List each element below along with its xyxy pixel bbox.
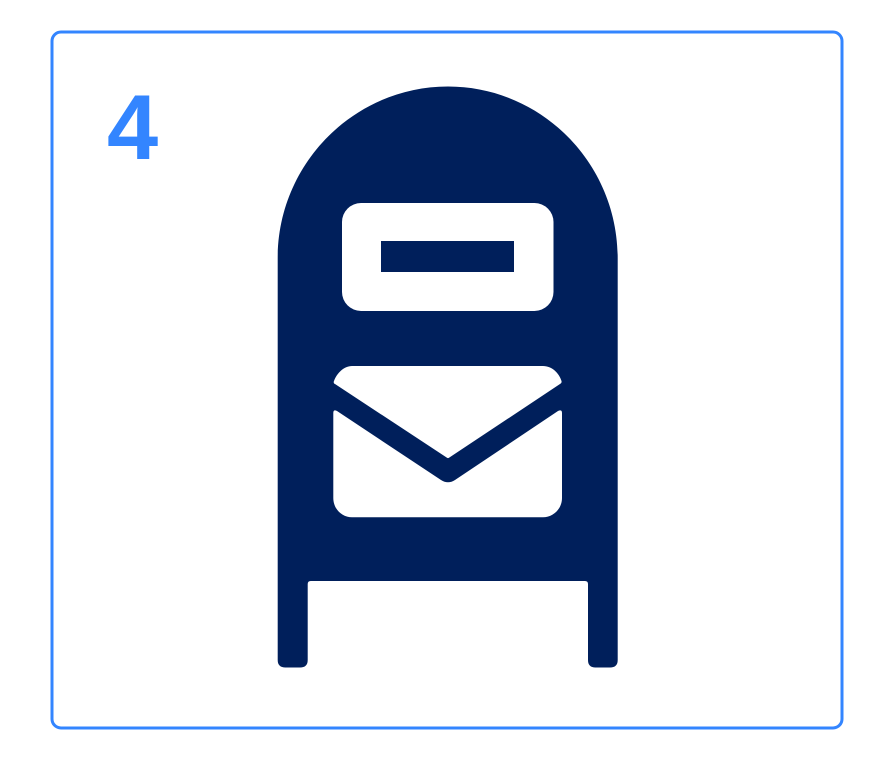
mail slot [381, 241, 514, 272]
mail slot plate [342, 203, 554, 311]
mailbox body [278, 86, 618, 668]
envelope flap [334, 366, 562, 458]
envelope body [333, 410, 562, 517]
icon: mailbox [278, 86, 618, 668]
heading: number 4: 4 [107, 77, 158, 179]
